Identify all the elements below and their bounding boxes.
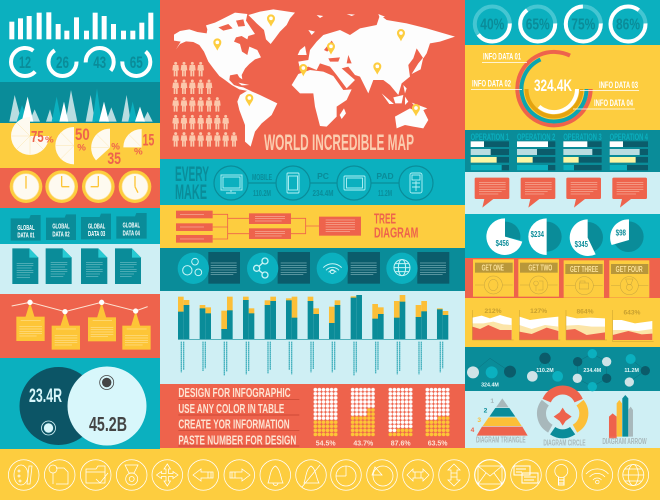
panel: mountain chart <box>9 88 153 122</box>
icon: four way arrows <box>152 460 183 490</box>
info data labels: INFO DATA 02 <box>472 78 511 88</box>
panel: document cards <box>12 248 141 284</box>
panel: design text list: DESIGN FOR INFOGRAPHIC <box>178 385 291 400</box>
icon: wifi <box>323 264 342 274</box>
panel: get one to four cards: GET TWO <box>528 264 552 273</box>
icon: monitor <box>221 175 242 193</box>
panel: area charts: 212% <box>484 308 502 315</box>
info data labels: INFO DATA 01 <box>483 52 521 62</box>
info data labels: INFO DATA 03 <box>599 80 638 90</box>
vertical axis labels <box>181 342 443 376</box>
icon: vertical arrows <box>439 460 469 490</box>
diagram triangle: 2 <box>484 408 488 415</box>
panel: get one to four cards: GET THREE <box>570 265 599 274</box>
panel: operation bars: OPERATION 3 <box>563 132 602 142</box>
panel: segmented donuts 12 26 43 65 <box>5 42 156 82</box>
panel: progress rings <box>475 6 646 42</box>
panel: dollar pies: $98 <box>616 229 626 238</box>
panel: get one to four cards: GET ONE <box>482 264 504 273</box>
icon: medal <box>116 460 147 490</box>
icon: pie sector <box>367 460 397 490</box>
icon: arrow left <box>188 460 219 490</box>
panel: concentric arc chart <box>471 52 639 125</box>
icon: phone <box>287 173 299 193</box>
panel: stacked bar chart <box>178 295 448 376</box>
panel: percentage pie charts: 75 <box>31 129 44 146</box>
panel: area charts <box>472 308 654 342</box>
icon: palette <box>8 460 39 490</box>
panel: every make devices <box>175 163 433 204</box>
panel: bubble groups: 324.4M <box>481 382 499 388</box>
diagram triangle: 1 <box>490 398 494 405</box>
panel: global data folders: DATA 01 <box>17 231 35 240</box>
panel: top left bar chart <box>9 12 153 39</box>
panel: global data folders: DATA 03 <box>88 229 105 238</box>
icon: key and document <box>44 460 75 490</box>
panel: percentage pie charts: 15 <box>143 130 154 149</box>
panel: dot matrix percentages: 54.5% <box>316 441 336 448</box>
panel: dollar pies: $234 <box>531 230 544 239</box>
diagram circle <box>541 390 586 448</box>
heading: tree diagram: DIAGRAM <box>374 226 418 242</box>
heading: tree diagram: TREE <box>374 211 396 227</box>
heading: tree diagram <box>374 211 418 242</box>
panel: dollar pies <box>486 218 644 256</box>
panel: clocks <box>10 170 151 203</box>
panel: segmented donuts 12 26 43 65: 12 <box>19 53 31 72</box>
panel: percentage pie charts: % <box>134 147 143 157</box>
diagram circle: DIAGRAM CIRCLE <box>543 439 586 448</box>
value 324.4K: 324.4K <box>534 76 572 95</box>
panel: bubble groups <box>467 349 650 391</box>
panel: global data folders: GLOBAL <box>88 221 105 230</box>
panel: segmented donuts 12 26 43 65: 65 <box>130 53 143 72</box>
icon: light bulb <box>546 460 577 490</box>
world map <box>174 9 455 147</box>
target dots <box>42 376 114 435</box>
icon: bell <box>260 460 291 490</box>
panel: every make devices: PC <box>317 171 329 181</box>
diagram triangle: 3 <box>477 417 481 424</box>
icon: muted bell <box>296 460 326 490</box>
panel: percentage pie charts: % <box>111 141 121 151</box>
panel: segmented donuts 12 26 43 65: 26 <box>56 53 69 72</box>
panel: dot matrix percentages: 87.6% <box>391 441 411 448</box>
panel: design text list <box>178 385 299 447</box>
panel: every make devices: 110.2M <box>253 188 271 198</box>
panel: get one to four cards <box>473 259 649 298</box>
icon: share <box>254 258 268 278</box>
panel: operation bars <box>471 132 648 170</box>
value 23.4R: 23.4R <box>29 386 62 407</box>
panel: bubble groups: 234.4M <box>583 368 602 374</box>
panel: timeline notes <box>12 300 151 350</box>
panel: progress rings: 75% <box>571 16 595 34</box>
icon: arrow right <box>224 460 255 490</box>
panel: global data folders: DATA 02 <box>52 229 70 238</box>
panel: progress rings: 86% <box>616 16 640 34</box>
people pictogram <box>172 62 237 147</box>
panel: every make devices: MAKE <box>175 181 207 204</box>
panel: bottom icon row <box>8 460 649 490</box>
diagram arrow <box>602 395 647 446</box>
icon: wifi <box>582 460 613 490</box>
panel: dot matrix percentages: 43.7% <box>353 441 374 448</box>
icon: pie chart <box>331 460 361 490</box>
diagram triangle <box>471 398 528 444</box>
icon: gears <box>183 258 202 276</box>
icon: calculator <box>410 173 422 193</box>
panel: percentage pie charts: % <box>45 134 54 144</box>
info data labels <box>472 52 638 108</box>
icon: notes <box>511 460 541 490</box>
panel: percentage pie charts <box>11 117 154 168</box>
panel: global data folders: GLOBAL <box>52 222 70 231</box>
panel: design text list: PASTE NUMBER FOR DESIGN <box>178 432 296 447</box>
panel: every make devices: EVERY <box>175 163 209 186</box>
panel: design text list: CREATE YOR INFORMATION <box>178 417 290 432</box>
icon: globe <box>618 460 649 490</box>
panel: operation bars: OPERATION 2 <box>517 132 555 142</box>
panel: tree diagram <box>176 211 418 243</box>
panel: percentage pie charts: 50 <box>75 125 90 144</box>
panel: dollar pies: $345 <box>575 240 588 249</box>
panel: percentage pie charts: % <box>77 143 87 153</box>
panel: every make devices: 11.2M <box>378 188 392 198</box>
diagram triangle: DIAGRAM TRIANGLE <box>476 435 526 444</box>
title: world incredible map: WORLD INCREDIBLE MAP <box>264 130 414 155</box>
map pins <box>213 14 420 116</box>
panel: progress rings: 65% <box>526 16 550 34</box>
info data labels: INFO DATA 04 <box>594 98 633 108</box>
panel: segmented donuts 12 26 43 65: 43 <box>93 53 106 72</box>
panel: every make devices: MOBILE <box>252 172 272 182</box>
panel: four feature cards <box>178 252 449 284</box>
panel: dollar pies: $456 <box>496 239 509 248</box>
panel: bubble groups: 110.2M <box>536 368 554 374</box>
panel: operation bars: OPERATION 1 <box>471 132 509 142</box>
icon: tablet <box>344 176 365 190</box>
panel: dot matrix percentages: 63.5% <box>428 441 448 448</box>
panel: progress rings: 40% <box>480 16 504 34</box>
icon: globe <box>394 260 410 276</box>
icon: horizontal arrows <box>403 460 433 490</box>
value 45.2B: 45.2B <box>89 414 127 436</box>
panel: global data folders <box>11 213 147 241</box>
panel: global data folders: GLOBAL <box>17 223 35 232</box>
panel: every make devices: PAD <box>376 171 394 181</box>
panel: get one to four cards: GET FOUR <box>616 265 643 274</box>
panel: speech bubbles <box>475 178 647 208</box>
panel: global data folders: DATA 04 <box>123 228 140 237</box>
panel: global data folders: GLOBAL <box>123 221 140 230</box>
panel: area charts: 864% <box>576 309 594 316</box>
panel: dot matrix percentages <box>313 388 450 448</box>
icon: folder check <box>80 460 111 490</box>
icon: envelope <box>475 460 505 490</box>
panel: overlapping circles <box>20 366 146 446</box>
panel: every make devices: 234.4M <box>312 188 334 198</box>
panel: design text list: USE ANY COLOR IN TABLE <box>178 401 284 416</box>
panel: area charts: 643% <box>623 309 641 316</box>
panel: percentage pie charts: 35 <box>107 149 121 168</box>
panel: area charts: 127% <box>530 308 547 315</box>
panel: bubble groups: 11.2M <box>624 368 639 374</box>
diagram triangle: 4 <box>471 427 475 434</box>
